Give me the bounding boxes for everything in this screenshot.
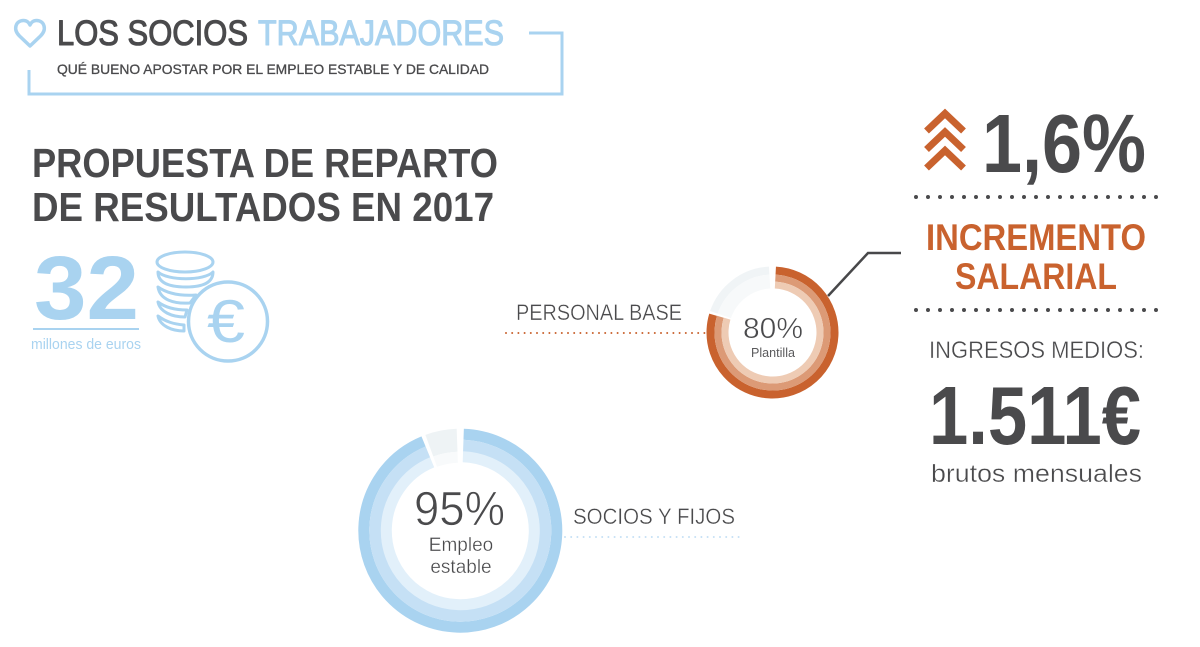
header frame (29, 33, 562, 94)
label: socios y fijos: SOCIOS Y FIJOS (573, 504, 735, 529)
rule under number (33, 328, 139, 330)
stat: ingresos medios: INGRESOS MEDIOS: (929, 337, 1144, 364)
icon: triple chevron up (926, 114, 964, 168)
donut caption: Empleo (429, 535, 493, 556)
icon: coins and euro: € (207, 288, 245, 355)
label: personal base: PERSONAL BASE (516, 300, 682, 325)
heading: propuesta de reparto: PROPUESTA DE REPARTO (32, 140, 498, 186)
donut chart: 95% empleo estable (344, 415, 576, 647)
heading: incremento salarial: SALARIAL (955, 256, 1117, 297)
heading: incremento salarial: INCREMENTO (926, 217, 1146, 258)
donut caption: Plantilla (751, 345, 796, 360)
donut chart: 95% empleo estable: estable (430, 557, 492, 578)
stat: ingresos medios: 1.511€ (929, 369, 1141, 462)
title: TRABAJADORES (258, 14, 504, 53)
heading: incremento salarial (926, 217, 1146, 297)
heading: propuesta de reparto: DE RESULTADOS EN 2017 (32, 184, 494, 230)
donut chart: 80% plantilla (694, 254, 851, 411)
stat: ingresos medios (929, 337, 1144, 488)
stat: 1,6%: 1,6% (982, 97, 1146, 190)
title: LOS SOCIOS (57, 14, 248, 53)
connector line (828, 253, 901, 296)
stat: 32 millones de euros (31, 239, 141, 353)
number 32: 32 (34, 239, 139, 339)
donut value: 95% (414, 483, 505, 536)
heading: propuesta de reparto (32, 140, 498, 230)
icon: heart (16, 20, 44, 46)
dotted divider (916, 195, 1158, 199)
stat: ingresos medios: brutos mensuales (931, 460, 1142, 488)
caption: millones de euros (31, 337, 141, 353)
subtitle: QUÉ BUENO APOSTAR POR EL EMPLEO ESTABLE Y DE CALIDAD (57, 61, 489, 77)
header: title block (16, 14, 562, 94)
dotted divider (916, 308, 1158, 312)
donut value: 80% (743, 313, 803, 345)
icon: coins and euro (157, 252, 268, 361)
